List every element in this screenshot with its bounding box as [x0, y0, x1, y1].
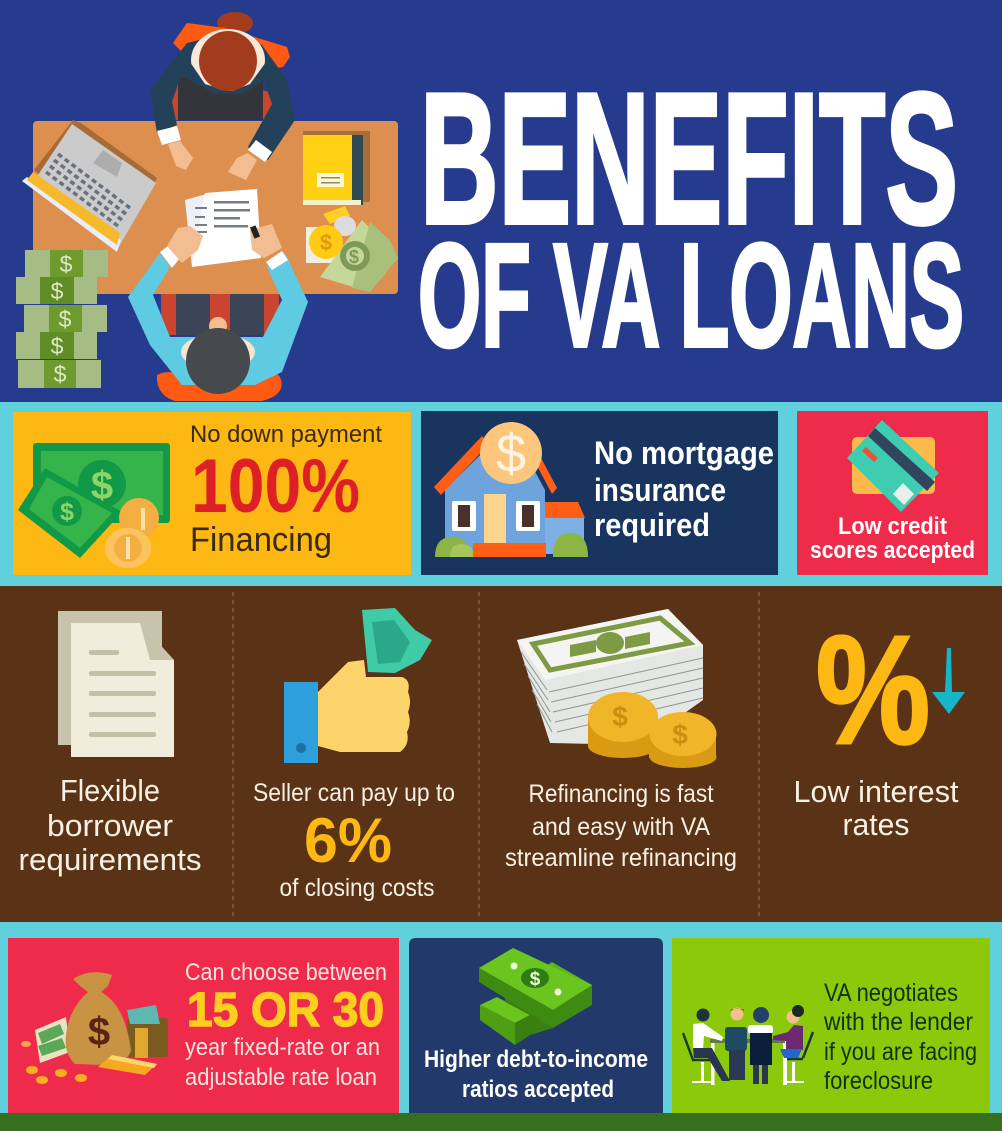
- text: can choose between: Can choose between: [185, 959, 387, 986]
- text: year fixed-rate: year fixed-rate or an: [185, 1034, 380, 1061]
- icon: document: [58, 611, 174, 757]
- icon: green cash stacks: [479, 948, 592, 1045]
- text: refinancing is fast: streamline refinancing: [505, 844, 737, 872]
- top person: [150, 12, 295, 180]
- text: seller can pay up to: Seller can pay up to: [253, 779, 455, 807]
- cuffs: [160, 246, 180, 268]
- text: higher debt-to-income ratios accepted: [424, 1046, 648, 1103]
- book: [303, 131, 370, 205]
- cuffs: [157, 126, 181, 145]
- cash row 2: $: [51, 278, 64, 304]
- text: va negotiates with the lender: if you are facing: [824, 1038, 977, 1066]
- text: low interest rates: [794, 774, 959, 842]
- icon: money bag with cash and gold: [21, 972, 168, 1084]
- text: low credit scores accepted: [810, 513, 975, 564]
- icon: banknotes and coins: $: [60, 498, 74, 526]
- text: refinancing is fast: Refinancing is fast: [528, 780, 714, 808]
- cash row 4: $: [51, 333, 64, 359]
- panel: no mortgage insurance: [421, 411, 778, 575]
- text: no mortgage insurance required: insurance: [594, 472, 726, 508]
- illustration: meeting at desk: [16, 12, 398, 401]
- chairs: [683, 1032, 813, 1060]
- coins and cash on desk: $: [320, 230, 332, 255]
- text: flexible borrower requirements: Flexible: [60, 773, 160, 808]
- icon: percent and arrow: %: [816, 604, 930, 776]
- icon: house with coin: [434, 422, 588, 557]
- text: low credit scores accepted: Low credit: [838, 513, 947, 540]
- text: financing: Financing: [190, 521, 332, 559]
- green footer strip: [0, 1113, 1002, 1131]
- text: higher debt-to-income ratios accepted: ratios accepted: [462, 1076, 614, 1103]
- icon: credit cards: [847, 420, 939, 512]
- icon: house with coin: $: [496, 424, 526, 484]
- title: [418, 54, 964, 378]
- text: refinancing is fast: and easy with VA: [532, 813, 710, 841]
- cash row 3: $: [59, 306, 72, 332]
- column dividers: [233, 592, 759, 918]
- person 2: [725, 1008, 747, 1080]
- text: va negotiates with the lender: [823, 979, 977, 1095]
- hands: [168, 141, 193, 170]
- text: va negotiates with the lender: VA negotiates: [824, 979, 958, 1007]
- text: refinancing is fast: [505, 780, 737, 872]
- brown band: [0, 586, 1002, 922]
- icon: banknotes and coins: $: [91, 464, 113, 508]
- cash row 1: $: [60, 251, 73, 277]
- text: higher debt-to-income ratios accepted: Higher debt-to-income: [424, 1046, 648, 1073]
- coins and cash on desk: [306, 206, 398, 292]
- text: no down payment: No down payment: [190, 421, 382, 448]
- icon: money bag with cash and gold: $: [88, 1010, 110, 1054]
- bottom person: [128, 246, 308, 401]
- icon: cash stack and coins: [517, 609, 716, 768]
- cash row 5: $: [54, 361, 67, 387]
- panel: 100% financing: [13, 412, 411, 575]
- coins and cash on desk: $: [349, 247, 359, 267]
- stack of cash: [16, 250, 108, 388]
- stat: 15 or 30: 15 OR 30: [187, 984, 384, 1037]
- person 3: [748, 1007, 773, 1084]
- panel: 15 or 30 year loan: [8, 938, 399, 1113]
- panel: low credit scores: [797, 411, 988, 575]
- text: flexible borrower requirements: requirements: [18, 842, 202, 877]
- text: no mortgage insurance required: No mortgage: [594, 435, 774, 471]
- text: va negotiates with the lender: foreclosure: [824, 1067, 933, 1095]
- stat: 100%: 100%: [191, 444, 360, 529]
- text: low interest rates: rates: [842, 807, 910, 842]
- text: adjustable rate loan: adjustable rate loan: [185, 1064, 377, 1091]
- keyboard: [46, 154, 130, 226]
- header background: [0, 0, 1002, 403]
- panel: va negotiates: [672, 938, 990, 1113]
- icon: green cash stacks: $: [530, 969, 541, 990]
- text: no mortgage insurance required: required: [594, 507, 710, 543]
- laptop: [22, 120, 157, 252]
- panel: higher debt-to-income: [409, 938, 663, 1113]
- documents and writing hands: [167, 189, 282, 267]
- text: no mortgage insurance required: [594, 435, 774, 543]
- text: low interest rates: Low interest: [794, 774, 959, 809]
- text: va negotiates with the lender: with the lender: [823, 1008, 973, 1036]
- text: of closing costs: of closing costs: [280, 874, 434, 902]
- person 4: [773, 1005, 804, 1058]
- text: low credit scores accepted: scores accepted: [810, 537, 975, 564]
- teal band: top: [0, 402, 1002, 587]
- desk: [33, 121, 398, 294]
- icon: cash stack and coins: $: [672, 719, 688, 750]
- stat: 6%: 6%: [304, 806, 392, 876]
- panel: brown benefits row: [18, 592, 965, 918]
- table and chair poles: [692, 1040, 804, 1085]
- icon: people at table: [683, 1005, 813, 1085]
- icon: cash stack and coins: $: [612, 701, 628, 732]
- teal band: bottom: [0, 922, 1002, 1114]
- text: flexible borrower requirements: borrower: [47, 808, 173, 843]
- person 1: [693, 1008, 730, 1081]
- icon: banknotes and coins: [18, 443, 170, 568]
- icon: hand holding cash: [284, 608, 432, 763]
- text: flexible borrower requirements: [18, 773, 202, 877]
